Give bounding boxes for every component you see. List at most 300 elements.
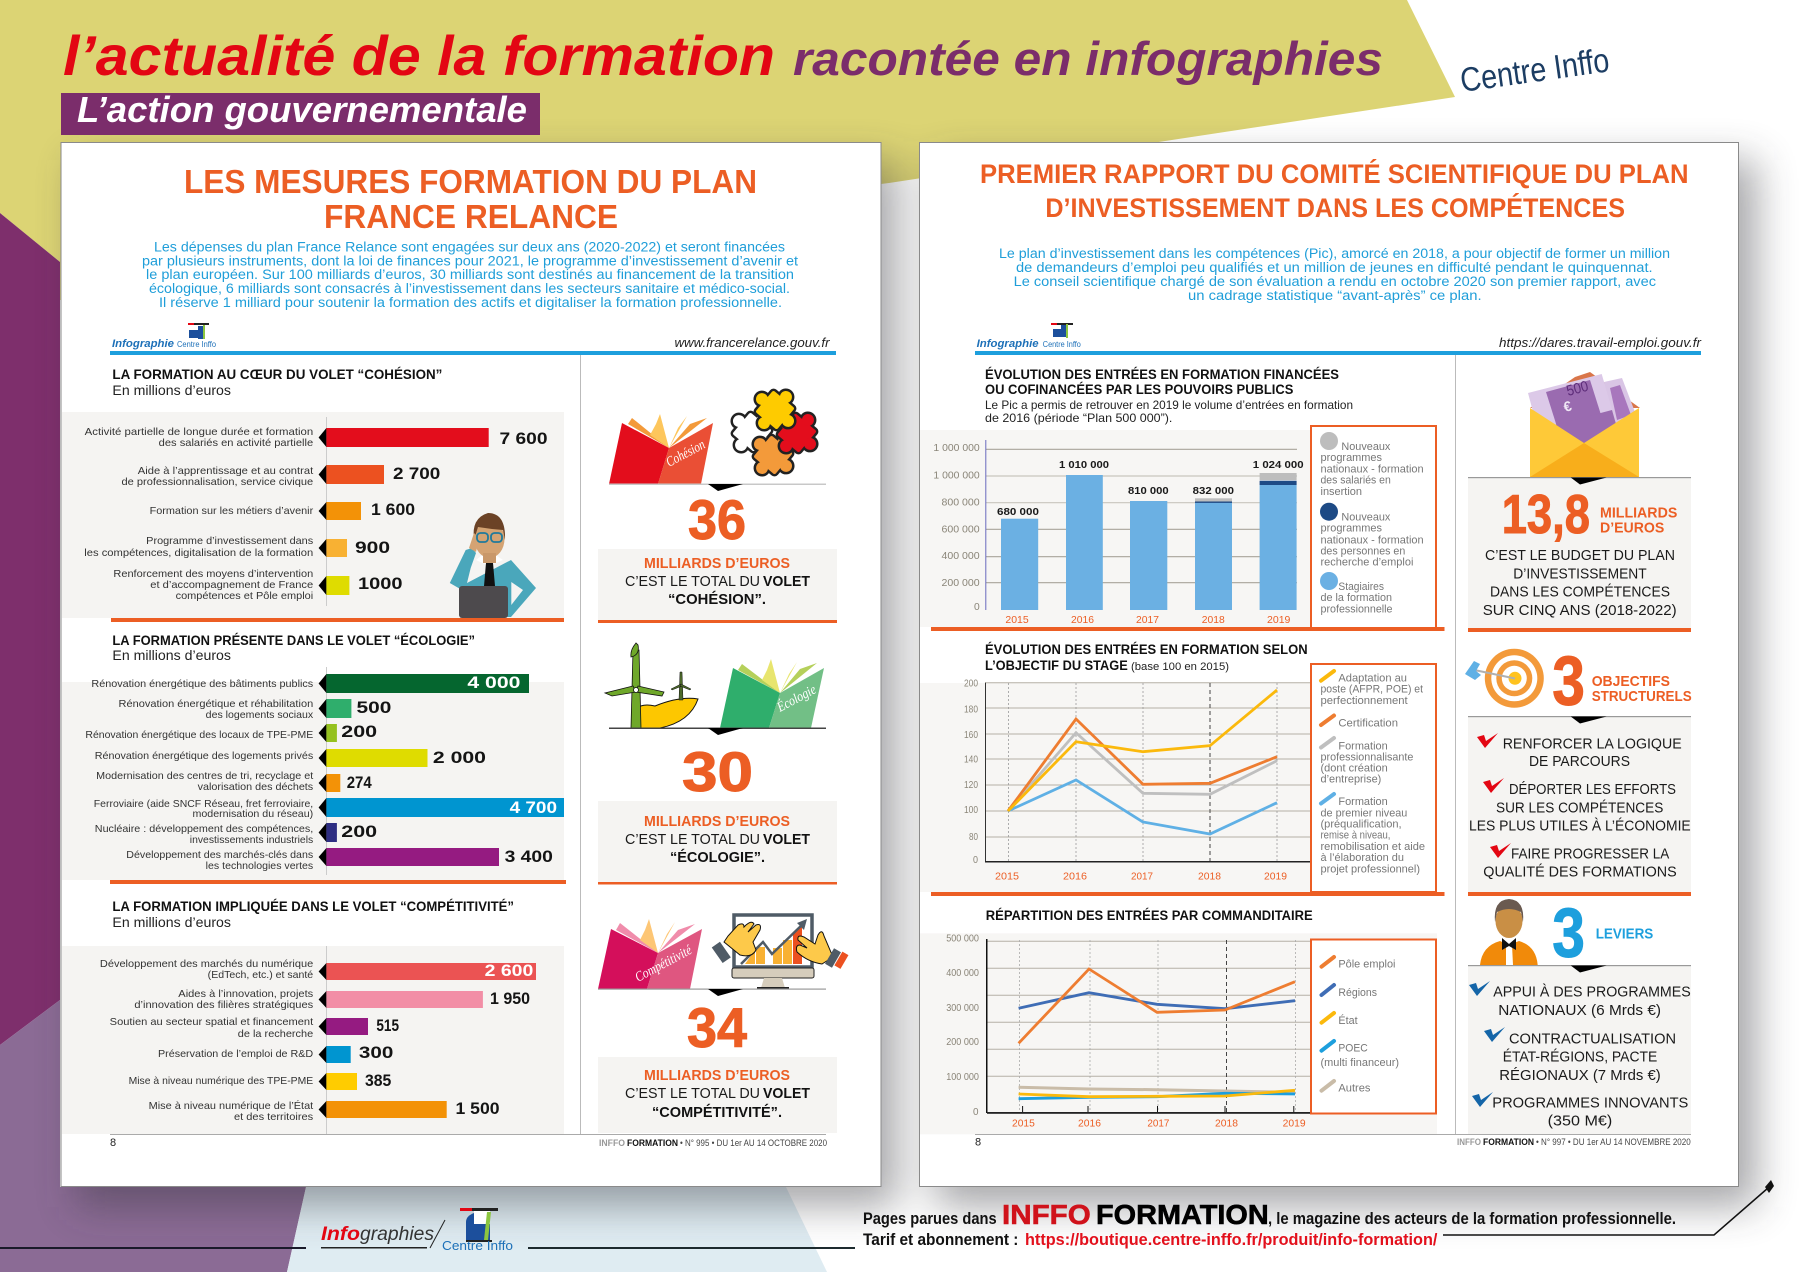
footer: left page: • N° 995 • DU 1er AU 14 OCTOBRE 2020: [680, 1138, 827, 1149]
heading: évolution entrées: OU COFINANCÉES PAR LES POUVOIRS PUBLICS: [985, 382, 1293, 397]
bar: technologies vertes: les technologies vertes: [206, 860, 313, 872]
bar: spatial: Soutien au secteur spatial et financement: [110, 1016, 313, 1028]
footer: right page: • N° 997 • DU 1er AU 14 NOVEMBRE 2020: [1536, 1137, 1691, 1148]
bar: programme d'investissement: 900: [355, 539, 390, 557]
legend: commanditaire: Pôle emploi: [1338, 959, 1396, 971]
bar: bâtiments publics: 4 000: [467, 674, 520, 692]
icon: envelope with banknotes: €: [1562, 397, 1574, 415]
list: objectifs: [1469, 733, 1691, 881]
heading: écologie: LA FORMATION PRÉSENTE DANS LE VOLET “ÉCOLOGIE”: [112, 633, 475, 648]
bottom promo text: INFFO: [1002, 1199, 1091, 1230]
caption: écologie: “ÉCOLOGIE”.: [670, 849, 765, 866]
heading: cohésion: [112, 367, 442, 398]
legend: stage: projet professionnel): [1320, 863, 1420, 875]
text block: left intro: le plan européen. Sur 100 milliards d’euros, 30 milliards sont destinés au financement de la transition: [146, 267, 794, 282]
number: 36: 36: [688, 488, 746, 551]
logo: Centre Inffo: Centre Inffo: [1458, 41, 1612, 100]
text block: right intro: Le conseil scientifique chargé de son évaluation a rendu en octobre 2020 son premier rapport, avec: [1014, 274, 1656, 289]
caption: budget: [1483, 547, 1677, 619]
legend: bar chart: professionnelle: [1320, 603, 1392, 615]
bar: innovation: Aides à l’innovation, projets: [178, 988, 313, 1000]
legend: stage: Formation: [1338, 740, 1388, 752]
bar: logements sociaux: Rénovation énergétique et réhabilitation: [118, 698, 313, 710]
bar: tri et recyclage: [96, 770, 372, 793]
credit line left: [112, 323, 830, 350]
legend: commanditaire: Régions: [1338, 987, 1377, 999]
bar: numérique TPE-PME: [129, 1072, 391, 1090]
bar: ferroviaire: Ferroviaire (aide SNCF Réseau, fret ferroviaire,: [94, 798, 313, 810]
heading: left page title: FRANCE RELANCE: [324, 199, 618, 236]
bar: bâtiments publics: Rénovation énergétique des bâtiments publics: [91, 678, 313, 690]
number: 13,8: D’EUROS: [1600, 520, 1664, 537]
caption: compétitivité: [625, 1067, 810, 1121]
heading: compétitivité: En millions d’euros: [112, 915, 231, 930]
text block: left intro: écologique, 6 milliards sont consacrés à l’investissement dans les secteurs sanitaire et médico-social.: [149, 281, 790, 296]
line chart: commanditaire: 2015: [1012, 1118, 1035, 1130]
bar: R&D: 300: [359, 1044, 393, 1062]
section banner: L’action gouvernementale: [77, 89, 527, 130]
footer: right page: INFFO: [1457, 1137, 1481, 1148]
text block: left intro: par plusieurs instruments, dont la loi de finances pour 2021, le programme d’investissement d’avenir et: [142, 254, 798, 268]
heading: compétitivité: [112, 899, 514, 930]
number: 13,8: [1502, 483, 1677, 545]
legend: bar chart: recherche d’emploi: [1320, 557, 1413, 569]
bar: spatial: de la recherche: [238, 1028, 313, 1040]
line chart: stage: 0: [973, 854, 978, 866]
text block: left intro: Il réserve 1 milliard pour soutenir la formation des actifs et digitaliser la formation professionnelle.: [159, 295, 782, 310]
bar: tri et recyclage: 274: [347, 774, 372, 792]
bar chart: 2016: [1071, 614, 1094, 626]
list: leviers: NATIONAUX (6 Mrds €): [1498, 1002, 1661, 1019]
bar: numérique État: Mise à niveau numérique de l’État: [149, 1099, 313, 1112]
list: objectifs: DÉPORTER LES EFFORTS: [1509, 781, 1676, 798]
bar: renforcement: [113, 568, 403, 602]
credit line left: Infographie: [112, 338, 174, 350]
line chart: stage: 80: [969, 831, 978, 843]
card shadows: [76, 160, 1757, 1207]
line chart: stage: [964, 678, 1310, 882]
bar chart: 800 000: [942, 497, 980, 509]
bar: activité partielle: 7 600: [500, 430, 548, 448]
bar chart: 2015: [1005, 614, 1029, 626]
bar: logements privés: 2 000: [433, 749, 486, 767]
line chart: stage: 2019: [1264, 870, 1287, 882]
bar: tri et recyclage: valorisation des déchets: [198, 781, 313, 793]
legend: commanditaire: POEC: [1338, 1043, 1368, 1055]
text block: left intro: Les dépenses du plan France Relance sont engagées sur deux ans (2020-2022) et seront financées: [154, 240, 785, 254]
line chart: commanditaire: 100 000: [946, 1071, 979, 1083]
bar: technologies vertes: [126, 848, 553, 872]
stat: 30 milliards écologie: [598, 643, 837, 884]
list: leviers: APPUI À DES PROGRAMMES: [1493, 984, 1691, 1001]
caption: cohésion: VOLET: [763, 573, 810, 590]
line chart: stage: 200: [964, 678, 978, 690]
stat: 34 milliards compétitivité: [598, 915, 848, 1133]
bar: numérique TPE-PME: 385: [365, 1072, 391, 1090]
footer: right page: FORMATION: [1483, 1137, 1534, 1148]
bar: locaux TPE-PME: Rénovation énergétique des locaux de TPE-PME: [85, 729, 313, 741]
footer: left page: [110, 1134, 827, 1149]
bar: programme d'investissement: les compétences, digitalisation de la formation: [84, 547, 313, 559]
heading: évolution entrées: de 2016 (période “Plan 500 000”).: [985, 411, 1172, 425]
stat: 3 leviers: [1468, 894, 1691, 1134]
arrow: to right page: [1443, 1180, 1774, 1235]
caption: cohésion: [625, 555, 810, 608]
footer: right page: [975, 1134, 1691, 1149]
caption: écologie: [625, 813, 810, 866]
text block: right intro: Le plan d’investissement dans les compétences (Pic), amorcé en 2018, a pour objectif de former un million: [999, 246, 1670, 261]
legend: bar chart: Nouveaux: [1341, 441, 1391, 453]
bar: activité partielle: des salariés en activité partielle: [159, 437, 313, 449]
label: objectifs structurels: [1592, 673, 1692, 705]
bar: ferroviaire: modernisation du réseau): [192, 808, 313, 820]
bar: programme d'investissement: [84, 535, 390, 559]
line chart: stage: 120: [964, 779, 978, 791]
bottom promo text: , le magazine des acteurs de la formation professionnelle.: [1268, 1210, 1676, 1228]
heading: cohésion: LA FORMATION AU CŒUR DU VOLET “COHÉSION”: [112, 367, 442, 382]
bar: ferroviaire: [94, 798, 564, 820]
bar chart: 1 024 000: [1253, 459, 1304, 471]
bar chart: 1 010 000: [1059, 459, 1109, 471]
legend: stage: Certification: [1338, 718, 1398, 730]
heading: évolution entrées: ÉVOLUTION DES ENTRÉES EN FORMATION FINANCÉES: [985, 367, 1339, 382]
label: objectifs structurels: STRUCTURELS: [1592, 688, 1692, 705]
list: leviers: RÉGIONAUX (7 Mrds €): [1499, 1067, 1661, 1084]
bottom promo text: Pages parues dans: [863, 1210, 997, 1228]
line chart: commanditaire: 2018: [1215, 1118, 1238, 1130]
bar: métiers d'avenir: [150, 501, 415, 520]
heading: écologie: [112, 633, 475, 663]
list: leviers: (350 M€): [1548, 1113, 1612, 1130]
stat: 36 milliards cohésion: [598, 378, 837, 623]
bar: technologies vertes: Développement des marchés-clés dans: [126, 849, 313, 861]
bar chart: 0: [974, 601, 980, 613]
bar: métiers d'avenir: 1 600: [371, 501, 415, 519]
bar: numérique État: 1 500: [456, 1100, 500, 1118]
text block: right intro: de demandeurs d’emploi peu qualifiés et un million de jeunes en difficulté pendant le quinquennat.: [1016, 260, 1653, 275]
legend: bar chart: programmes: [1320, 523, 1382, 535]
bottom promo text: [863, 1199, 1676, 1249]
bar: innovation: [134, 988, 530, 1011]
bar chart: 810 000: [1128, 485, 1169, 497]
bottom logo: Infographies Centre Inffo: graphies: [360, 1224, 434, 1245]
heading: évolution entrées: [985, 367, 1353, 425]
bar: numérique: (EdTech, etc.) et santé: [208, 969, 313, 981]
bar: innovation: 1 950: [490, 990, 530, 1008]
caption: cohésion: “COHÉSION”.: [668, 591, 766, 608]
legend: bar chart: insertion: [1320, 486, 1362, 498]
caption: écologie: MILLIARDS D’EUROS: [644, 813, 790, 830]
caption: écologie: C’EST LE TOTAL DU: [625, 831, 760, 848]
bottom logo: Infographies Centre Inffo: Info: [321, 1224, 360, 1245]
bar: locaux TPE-PME: 200: [341, 723, 377, 741]
bar: numérique État: et des territoires: [234, 1111, 313, 1123]
text block: right intro: un cadrage statistique “avant-après” ce plan.: [1188, 288, 1482, 303]
bar: nucléaire: investissements industriels: [190, 834, 313, 846]
section: Compétitivité bars: [62, 899, 564, 1134]
footer: left page: FORMATION: [627, 1138, 678, 1149]
legend: bar chart: nationaux - formation: [1320, 534, 1424, 546]
caption: compétitivité: C’EST LE TOTAL DU: [625, 1085, 760, 1102]
section: line chart objectif du stage: [920, 642, 1444, 896]
panel: right page, rapport Pic: [920, 142, 1738, 1186]
heading: commanditaire: RÉPARTITION DES ENTRÉES PAR COMMANDITAIRE: [986, 908, 1313, 923]
legend: stage: (préqualification,: [1320, 819, 1402, 831]
icon: green book: [720, 659, 824, 728]
bar: logements sociaux: [118, 698, 391, 721]
legend: stage: à l’élaboration du: [1320, 852, 1404, 864]
legend: bar chart: Nouveaux: [1341, 512, 1391, 524]
heading: right page title: [980, 158, 1689, 223]
line chart: commanditaire: 400 000: [946, 967, 979, 979]
heading: objectif du stage: [985, 642, 1308, 673]
caption: budget: C’EST LE BUDGET DU PLAN: [1485, 547, 1675, 564]
line chart: stage: 2016: [1063, 870, 1087, 882]
bar: numérique État: [149, 1099, 500, 1123]
text block: left intro: [142, 240, 798, 310]
bar chart: 832 000: [1193, 485, 1234, 497]
number: 13,8: 13,8: [1502, 483, 1590, 545]
bar: activité partielle: [85, 426, 547, 449]
section: bar chart entrées: [920, 367, 1444, 631]
caption: compétitivité: “COMPÉTITIVITÉ”.: [652, 1104, 782, 1121]
icon: puzzle: [720, 378, 829, 487]
credit line left: www.francerelance.gouv.fr: [674, 336, 830, 350]
icon: pink book: Compétitivité: [633, 943, 695, 986]
line chart: stage: 140: [964, 754, 978, 766]
legend: bar chart: des personnes en: [1320, 545, 1405, 557]
bar: numérique: 2 600: [485, 962, 533, 980]
panel: left page, mesures France Relance: [61, 142, 881, 1186]
bar chart: 2019: [1267, 614, 1291, 626]
icon: monitor with hands: [712, 915, 848, 989]
line chart: stage: 2015: [995, 870, 1019, 882]
bar chart: 400 000: [942, 550, 980, 562]
bar: métiers d'avenir: Formation sur les métiers d’avenir: [150, 505, 314, 517]
bar: spatial: [110, 1016, 399, 1040]
number: 13,8: MILLIARDS: [1600, 504, 1677, 521]
legend: bar chart: [1311, 426, 1436, 628]
heading: évolution entrées: Le Pic a permis de retrouver en 2019 le volume d’entrées en formation: [985, 398, 1353, 412]
bar chart: 680 000: [997, 506, 1039, 518]
bar chart: 2017: [1136, 614, 1159, 626]
bar chart: 200 000: [942, 577, 980, 589]
footer: right page: 8: [975, 1137, 981, 1149]
bar: renforcement: 1000: [358, 575, 402, 593]
caption: cohésion: C’EST LE TOTAL DU: [625, 573, 760, 590]
legend: stage: de premier niveau: [1320, 808, 1407, 820]
legend: stage: [1311, 664, 1436, 892]
bar: tri et recyclage: Modernisation des centres de tri, recyclage et: [96, 770, 313, 782]
bar: logements privés: Rénovation énergétique des logements privés: [95, 750, 313, 762]
credit line right: Infographie: [977, 338, 1039, 350]
legend: stage: poste (AFPR, POE) et: [1320, 684, 1423, 696]
legend: bar chart: de la formation: [1320, 592, 1392, 604]
bar: R&D: [158, 1044, 393, 1063]
heading: objectif du stage: L’OBJECTIF DU STAGE: [985, 658, 1128, 673]
line chart: commanditaire: 2019: [1283, 1118, 1306, 1130]
line chart: commanditaire: 300 000: [946, 1002, 979, 1014]
legend: commanditaire: [1311, 940, 1436, 1114]
caption: compétitivité: VOLET: [763, 1085, 810, 1102]
line chart: commanditaire: 2016: [1078, 1118, 1101, 1130]
bar: nucléaire: [95, 823, 377, 846]
line chart: stage: 2018: [1198, 870, 1221, 882]
credit line left: Centre Inffo: [177, 340, 217, 349]
line chart: stage: 2017: [1131, 870, 1153, 882]
text block: right intro: [999, 246, 1670, 303]
line chart: commanditaire: 500 000: [946, 933, 979, 945]
heading: right page title: PREMIER RAPPORT DU COMITÉ SCIENTIFIQUE DU PLAN: [980, 158, 1689, 189]
bar chart: 600 000: [942, 524, 980, 536]
caption: cohésion: MILLIARDS D’EUROS: [644, 555, 790, 572]
icon: pink book: [598, 919, 702, 989]
bar: apprentissage: 2 700: [393, 465, 440, 483]
caption: budget: DANS LES COMPÉTENCES: [1490, 584, 1670, 601]
bar: logements sociaux: des logements sociaux: [206, 709, 314, 721]
line chart: stage: 100: [964, 804, 978, 816]
number: 34: 34: [687, 996, 747, 1059]
icon: man with laptop: [450, 513, 536, 618]
label: leviers: LEVIERS: [1596, 925, 1653, 942]
legend: commanditaire: État: [1338, 1014, 1358, 1027]
icon: green book: Écologie: [773, 681, 819, 716]
credit line right: [977, 323, 1702, 350]
legend: stage: Formation: [1338, 796, 1388, 808]
legend: commanditaire: (multi financeur): [1320, 1057, 1399, 1069]
bar: programme d'investissement: Programme d’investissement dans: [146, 535, 313, 547]
legend: stage: perfectionnement: [1320, 695, 1408, 707]
bar chart: [933, 440, 1304, 626]
stat: 13,8 milliards: [1468, 372, 1691, 632]
bar: bâtiments publics: [91, 674, 529, 693]
bar chart: 1 000 000: [933, 469, 980, 481]
label: objectifs structurels: OBJECTIFS: [1592, 673, 1670, 690]
line chart: commanditaire: 0: [973, 1106, 979, 1118]
caption: budget: SUR CINQ ANS (2018-2022): [1483, 602, 1677, 619]
list: objectifs: LES PLUS UTILES À L’ÉCONOMIE: [1469, 817, 1691, 834]
legend: stage: d’entreprise): [1320, 774, 1381, 786]
caption: budget: D’INVESTISSEMENT: [1513, 565, 1647, 582]
bar: logements sociaux: 500: [356, 699, 391, 717]
icon: envelope with banknotes: 500: [1565, 378, 1590, 400]
bar: technologies vertes: 3 400: [505, 848, 553, 866]
bottom promo text: FORMATION: [1096, 1199, 1269, 1230]
legend: stage: Adaptation au: [1338, 673, 1407, 685]
heading: objectif du stage: (base 100 en 2015): [1131, 661, 1229, 673]
bar: numérique TPE-PME: Mise à niveau numérique des TPE-PME: [129, 1075, 313, 1087]
list: objectifs: DE PARCOURS: [1529, 753, 1630, 770]
legend: stage: professionnalisante: [1320, 752, 1413, 764]
heading: left page title: [184, 164, 757, 236]
bar: apprentissage: [122, 465, 440, 488]
list: leviers: [1469, 981, 1691, 1130]
list: objectifs: QUALITÉ DES FORMATIONS: [1483, 864, 1677, 881]
line chart: stage: 180: [964, 704, 978, 716]
list: leviers: CONTRACTUALISATION: [1509, 1030, 1676, 1047]
icon: target: [1465, 649, 1544, 708]
icon: red book: Cohésion: [664, 438, 708, 471]
legend: stage: (dont création: [1320, 763, 1388, 775]
section: Écologie bars: [62, 633, 566, 884]
bottom logo: Infographies Centre Inffo: [0, 1208, 855, 1253]
main title: l’actualité de la formation: [63, 24, 775, 87]
main title: racontée en infographies: [793, 32, 1383, 85]
icon: red book: [609, 414, 713, 484]
icon: man with orange jacket: [1480, 899, 1538, 965]
section: line chart commanditaire: [920, 908, 1437, 1134]
legend: bar chart: programmes: [1320, 452, 1382, 464]
heading: left page title: LES MESURES FORMATION DU PLAN: [184, 164, 757, 201]
icon: wind turbines and leaf: [605, 643, 698, 728]
bar: numérique: [100, 958, 536, 981]
caption: écologie: VOLET: [763, 831, 810, 848]
stat: 3 objectifs structurels: [1465, 641, 1692, 896]
heading: objectif du stage: ÉVOLUTION DES ENTRÉES EN FORMATION SELON: [985, 642, 1308, 657]
bar: apprentissage: de professionnalisation, service civique: [122, 476, 313, 488]
bottom promo text: https://boutique.centre-inffo.fr/produit/info-formation/: [1025, 1231, 1438, 1249]
number: 3 blue: 3: [1552, 894, 1585, 972]
heading: right page title: D’INVESTISSEMENT DANS LES COMPÉTENCES: [1045, 192, 1625, 223]
line chart: commanditaire: [946, 933, 1310, 1130]
heading: compétitivité: LA FORMATION IMPLIQUÉE DANS LE VOLET “COMPÉTITIVITÉ”: [112, 899, 514, 914]
footer: left page: INFFO: [599, 1138, 625, 1149]
bar: logements privés: [95, 749, 486, 767]
bar: innovation: d’innovation des filières stratégiques: [134, 999, 313, 1011]
caption: compétitivité: MILLIARDS D’EUROS: [644, 1067, 790, 1084]
legend: bar chart: des salariés en: [1320, 475, 1391, 487]
bar: nucléaire: 200: [341, 823, 377, 841]
bar: renforcement: compétences et Pôle emploi: [176, 590, 313, 602]
list: objectifs: RENFORCER LA LOGIQUE: [1503, 735, 1682, 752]
legend: bar chart: Stagiaires: [1338, 581, 1384, 593]
credit line right: https://dares.travail-emploi.gouv.fr: [1499, 336, 1702, 350]
heading: écologie: En millions d’euros: [112, 648, 231, 663]
section: Cohésion bars: [62, 367, 564, 622]
bar: renforcement: Renforcement des moyens d’intervention: [113, 568, 313, 580]
bar: renforcement: et d’accompagnement de France: [150, 579, 313, 591]
legend: stage: remobilisation et aide: [1320, 841, 1425, 853]
line chart: commanditaire: 200 000: [946, 1036, 979, 1048]
bottom promo text: Tarif et abonnement :: [863, 1231, 1018, 1249]
legend: commanditaire: Autres: [1338, 1083, 1371, 1095]
bar: numérique: Développement des marchés du numérique: [100, 958, 313, 970]
list: objectifs: SUR LES COMPÉTENCES: [1496, 799, 1663, 816]
bottom logo: Infographies Centre Inffo: Centre Inffo: [442, 1238, 513, 1253]
number: 3: 3: [1552, 641, 1585, 719]
legend: bar chart: nationaux - formation: [1320, 463, 1424, 475]
line chart: stage: 160: [964, 729, 978, 741]
bar chart: 2018: [1202, 614, 1225, 626]
line chart: commanditaire: 2017: [1147, 1118, 1170, 1130]
number: 30: 30: [682, 740, 753, 803]
bar: R&D: Préservation de l’emploi de R&D: [158, 1048, 314, 1060]
icon: envelope with banknotes: [1528, 372, 1640, 477]
list: objectifs: FAIRE PROGRESSER LA: [1511, 845, 1669, 862]
bar: activité partielle: Activité partielle de longue durée et formation: [85, 426, 313, 438]
main title: [63, 24, 1383, 87]
bar: ferroviaire: 4 700: [510, 799, 557, 817]
footer: left page: 8: [110, 1137, 116, 1149]
credit line right: Centre Inffo: [1043, 340, 1081, 349]
list: leviers: ÉTAT-RÉGIONS, PACTE: [1503, 1049, 1657, 1066]
legend: stage: remise à niveau,: [1320, 830, 1390, 842]
list: leviers: PROGRAMMES INNOVANTS: [1492, 1095, 1688, 1112]
bar: locaux TPE-PME: [85, 723, 377, 742]
bar chart: 1 000 000: [933, 442, 980, 454]
bar: nucléaire: Nucléaire : développement des compétences,: [95, 823, 313, 835]
heading: cohésion: En millions d’euros: [112, 383, 231, 398]
